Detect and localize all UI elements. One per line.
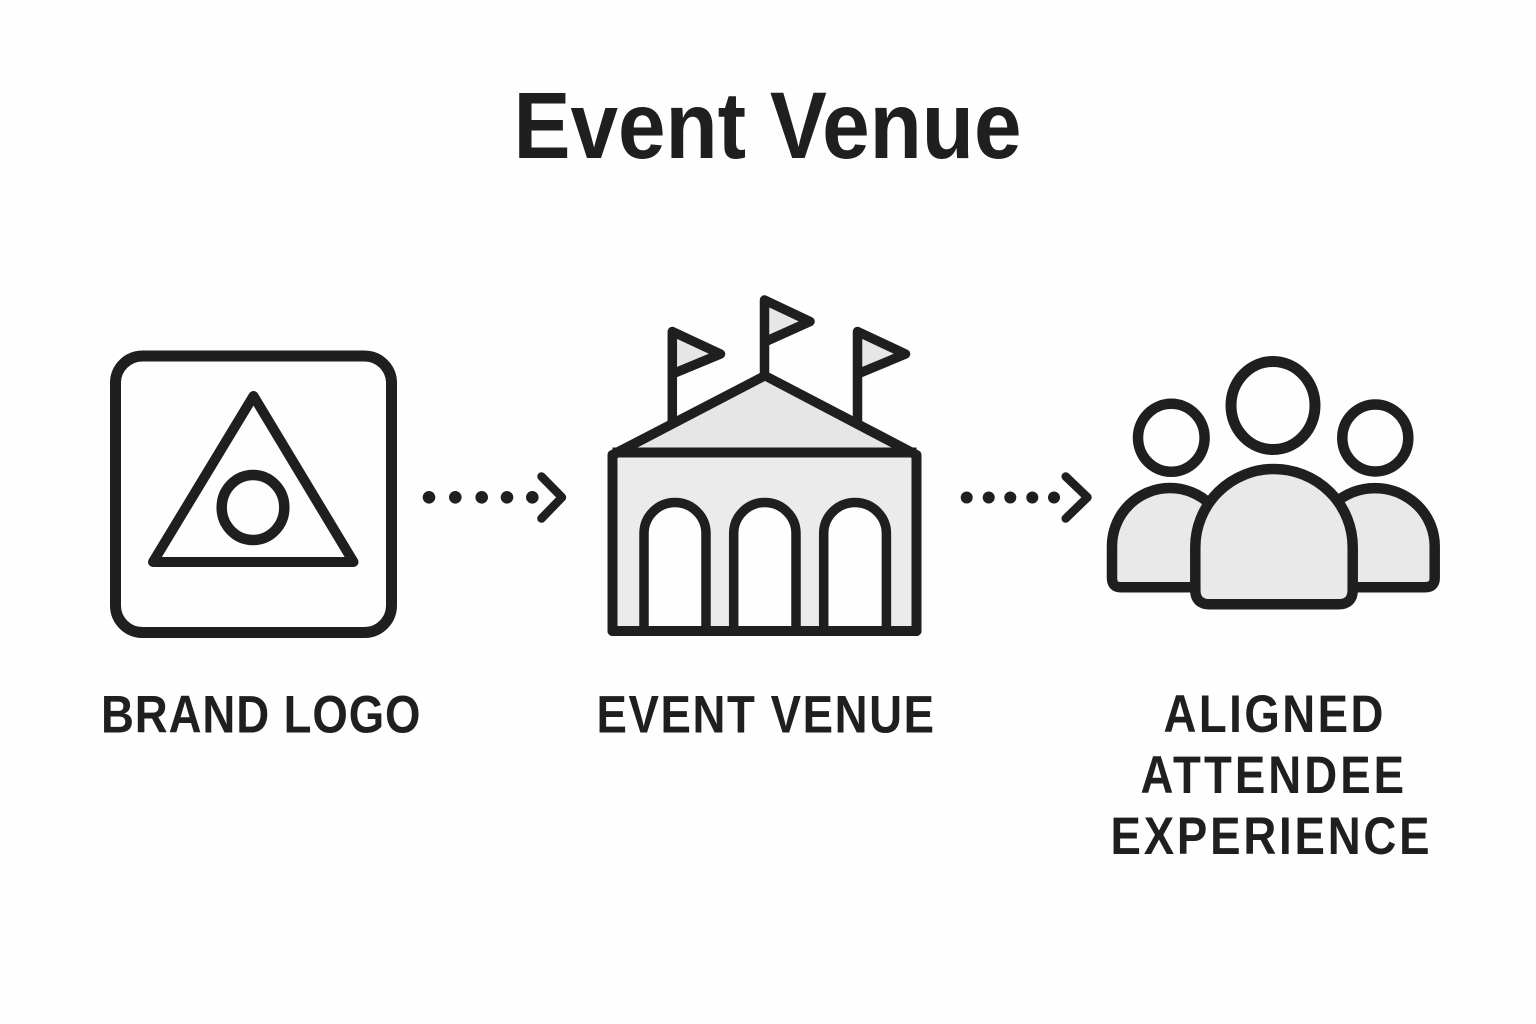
label: aligned attendee experience <box>1110 685 1430 866</box>
arrow: brand logo to venue <box>423 476 562 518</box>
label: aligned attendee experience: ALIGNED <box>1164 685 1383 744</box>
label: brand logo: BRAND LOGO <box>101 685 420 744</box>
label: aligned attendee experience: ATTENDEE <box>1140 746 1404 805</box>
label: aligned attendee experience: EXPERIENCE <box>1110 807 1430 866</box>
icon: brand logo <box>116 356 392 632</box>
arrow: venue to attendees <box>961 476 1088 518</box>
icon: attendees <box>1112 362 1435 604</box>
title: Event Venue <box>514 73 1022 179</box>
label: event venue: EVENT VENUE <box>596 685 934 744</box>
icon: event venue <box>612 300 916 631</box>
